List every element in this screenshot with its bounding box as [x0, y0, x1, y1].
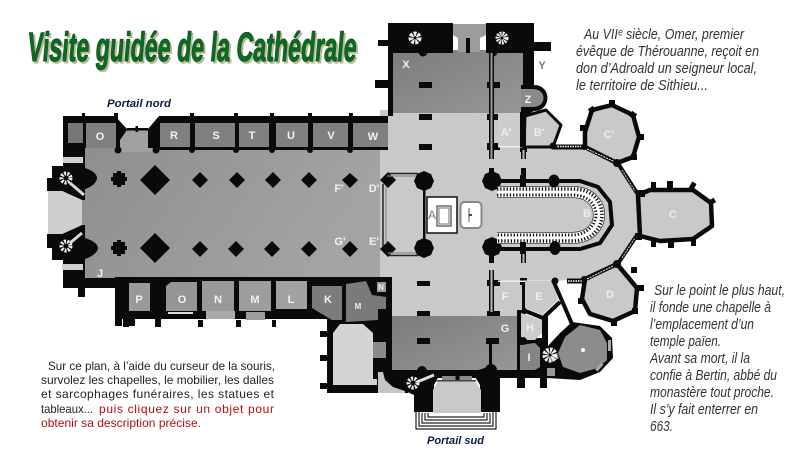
south transept dark floor: [392, 316, 520, 372]
choir pillars: [520, 174, 560, 255]
south portal: [403, 366, 500, 429]
chapel letters: M: [355, 302, 362, 311]
nave floor: [80, 148, 382, 279]
chapel letters: Y: [538, 60, 546, 72]
north portal: [453, 24, 486, 52]
chapel letters: T: [249, 130, 256, 142]
text block: intro: Au VIIᵉ siècle, Omer, premier: [583, 27, 745, 43]
chapel letters: J: [97, 268, 103, 280]
chapel letters: E': [369, 236, 379, 248]
chapel letters: O: [178, 294, 187, 306]
south walls: [115, 277, 522, 393]
north portal door mark: [466, 38, 470, 53]
text block: chapel history: l’emplacement d’un: [650, 317, 754, 333]
chapel letters: W: [368, 131, 379, 143]
text block: instructions: puis cliquez sur un objet pour: [99, 402, 274, 416]
chapel buttresses: [550, 100, 716, 326]
text block: chapel history: Avant sa mort, il la: [649, 351, 750, 367]
chapel letters: U: [287, 130, 295, 142]
text block: intro: évêque de Thérouanne, reçoit en: [576, 44, 759, 60]
chapel letters: A: [428, 208, 436, 222]
chapel letters: C: [669, 209, 677, 221]
chapel letters: K: [324, 294, 332, 306]
chapel letters: F': [334, 183, 344, 195]
radiating chapels and walls: [523, 105, 712, 324]
label: Portail sud: Portail sud: [427, 435, 484, 447]
second altar: [460, 202, 482, 228]
south chapels: [129, 281, 386, 358]
text block: chapel history: confie à Bertin, abbé du: [650, 368, 777, 384]
text block: intro: [576, 27, 759, 94]
chapel letters: M: [250, 294, 260, 306]
octagonal chapel: [546, 322, 613, 380]
nave piers: [111, 165, 396, 263]
transept and ambulatory floor: [380, 110, 638, 318]
chapel letters: E: [535, 291, 543, 303]
room L: [333, 324, 377, 385]
title: Visite guidée de la Cathédrale: [26, 24, 359, 70]
south-west sacristy passage: [378, 372, 405, 393]
spiral stairs: [62, 34, 506, 250]
chapel letters: B': [534, 127, 545, 139]
title: Visite guidée de la Cathédrale: [28, 26, 361, 72]
chapel letters: D': [369, 183, 380, 195]
cathedral floor plan: [47, 23, 716, 429]
chapel letters: R: [170, 130, 178, 142]
chapel letters: N: [378, 283, 384, 292]
text block: intro: le territoire de Sithieu...: [576, 78, 708, 94]
chapel letters: P: [135, 294, 143, 306]
chapel letters: [96, 59, 677, 364]
chapel letters: G': [334, 236, 346, 248]
chapel letters: V: [327, 130, 335, 142]
chapel letters: C': [604, 129, 615, 141]
south east chapel group H I: [517, 310, 548, 388]
choir enclosure: [492, 181, 612, 249]
chapel letters: G: [501, 323, 509, 335]
text block: chapel history: temple païen.: [650, 334, 721, 350]
chapel letters: L: [288, 294, 295, 306]
text block: instructions: [41, 359, 275, 430]
chapel letters: B: [583, 208, 591, 220]
chapel letters: X: [402, 59, 410, 71]
chapel letters: O: [96, 131, 105, 143]
chapel letters: Z: [525, 94, 532, 106]
title: [26, 24, 361, 72]
text block: intro: don d’Adroald un seigneur local,: [576, 61, 757, 77]
text block: instructions: et sarcophages funéraires, les statues et: [41, 387, 275, 401]
text block: instructions: obtenir sa description précise.: [41, 416, 201, 430]
chapel letters: N: [214, 294, 222, 306]
chapel letters: I: [527, 352, 531, 364]
chapel letters: D: [606, 289, 614, 301]
text block: instructions: tableaux...: [41, 402, 93, 416]
chapel letters: F: [502, 291, 509, 303]
west front: [47, 157, 150, 326]
text block: chapel history: monastère tout proche.: [650, 385, 774, 401]
north transept dark floor: [388, 50, 523, 113]
crossing frame: [383, 174, 418, 256]
chapel letters: H: [526, 322, 534, 334]
label: Portail nord: Portail nord: [107, 98, 171, 110]
north portal porch floor: [120, 130, 155, 152]
text block: chapel history: Il s’y fait enterrer en: [650, 402, 758, 418]
transept piers and columns: [414, 53, 553, 376]
text block: chapel history: il fonde une chapelle à: [650, 300, 771, 316]
text block: instructions: Sur ce plan, à l’aide du curseur de la souris,: [48, 359, 275, 373]
north chapels: [68, 123, 388, 148]
Z apse: [498, 85, 548, 147]
north walls: [63, 23, 551, 166]
chapel letters: A': [501, 127, 512, 139]
text block: instructions: survolez les chapelles, le mobilier, les dalles: [41, 373, 274, 387]
main altar A: [427, 197, 457, 233]
text block: chapel history: 663.: [650, 419, 673, 435]
text block: chapel history: [649, 283, 785, 435]
chapel letters: S: [212, 130, 220, 142]
